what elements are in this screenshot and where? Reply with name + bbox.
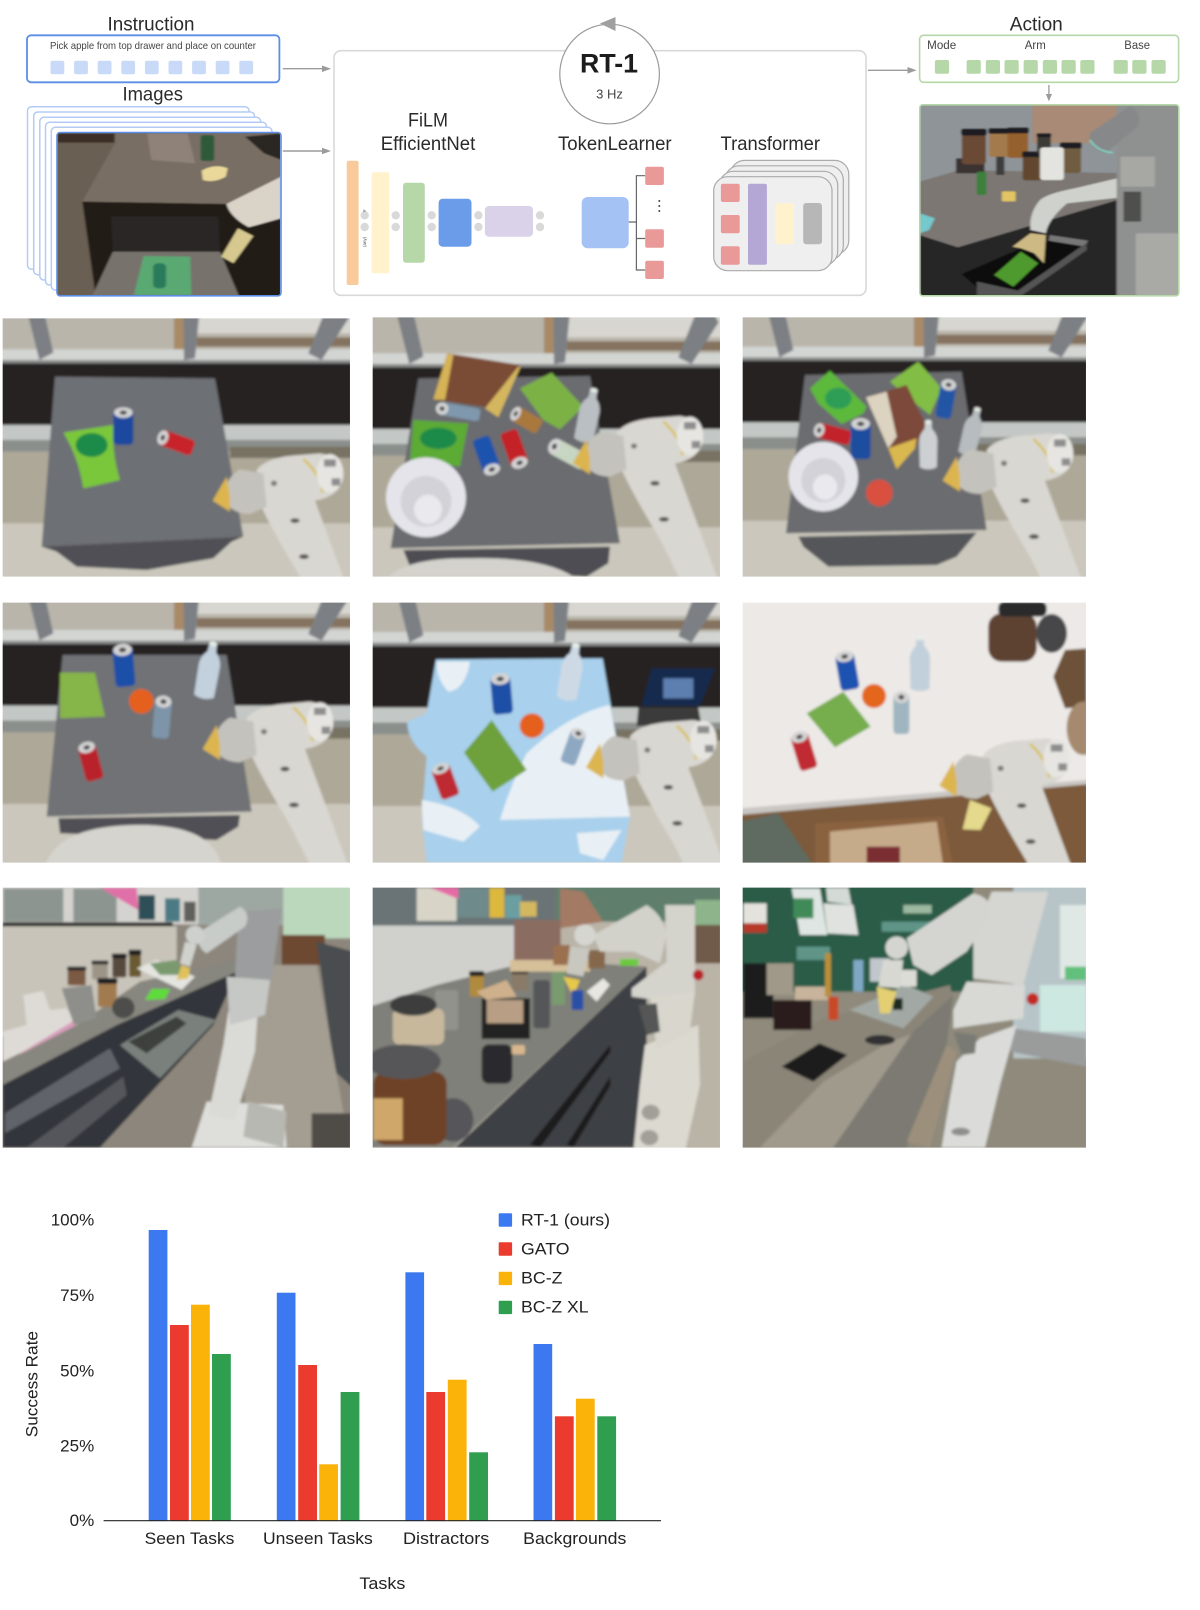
action labels: Base xyxy=(1124,40,1150,52)
tiny rotated labels: # xyxy=(362,209,367,212)
connector dots xyxy=(360,211,544,231)
table top xyxy=(42,377,243,547)
table drawers xyxy=(42,537,243,570)
heading: TokenLearner: TokenLearner xyxy=(558,133,672,155)
action labels xyxy=(927,40,1150,52)
robot base xyxy=(192,1102,287,1148)
RT-1 loop circle xyxy=(560,17,659,124)
e-stop xyxy=(693,970,704,980)
robot arm xyxy=(198,907,247,953)
heading: FiLM EfficientNet: EfficientNet xyxy=(381,133,476,155)
vents xyxy=(951,1128,970,1136)
jar at right edge xyxy=(1067,702,1100,755)
action labels: Arm xyxy=(1025,40,1046,52)
wood column xyxy=(514,920,561,963)
table top xyxy=(47,655,252,817)
vents xyxy=(642,1105,660,1120)
dong bag xyxy=(410,420,468,467)
counter top xyxy=(3,960,237,1085)
action token squares xyxy=(935,60,1166,74)
window panes xyxy=(3,888,63,922)
Pepsi can xyxy=(112,643,136,687)
arrow: images to RT-1 xyxy=(283,148,331,154)
water bottle xyxy=(573,386,604,444)
top right mural xyxy=(198,885,285,925)
robot arm xyxy=(572,414,717,576)
Pepsi can xyxy=(472,435,502,478)
mesh cup xyxy=(1036,614,1067,653)
right cabinet xyxy=(317,942,353,1088)
orange xyxy=(129,689,154,714)
wood planter xyxy=(282,935,325,965)
table drawers xyxy=(798,533,977,567)
brown chip bag xyxy=(439,352,520,408)
water bottle xyxy=(556,641,587,702)
TokenLearner block and tokens xyxy=(582,167,664,279)
posters xyxy=(138,895,155,920)
wall xyxy=(0,926,177,1036)
chip bag xyxy=(63,425,120,488)
green bag xyxy=(60,673,105,718)
legend: GATO xyxy=(521,1239,570,1258)
orange xyxy=(520,713,544,738)
y axis tick labels xyxy=(51,1211,94,1530)
y axis tick labels: 100% xyxy=(51,1211,94,1230)
photo: table with chips, Pepsi and Coke xyxy=(2,318,350,577)
bar chart: success rate by task type xyxy=(22,1211,661,1593)
Coke can xyxy=(789,729,818,772)
counter xyxy=(370,960,647,1148)
Pepsi can upright xyxy=(935,378,957,419)
Transformer stack xyxy=(714,160,849,271)
Coke can xyxy=(430,761,460,801)
white bowl xyxy=(789,442,858,511)
drawer fronts xyxy=(5,1048,120,1133)
green bag xyxy=(807,692,871,747)
water bottle xyxy=(193,640,224,701)
photo: robot at counter with open drawer xyxy=(0,885,367,1158)
sky cloth table xyxy=(407,658,630,863)
robot mid body xyxy=(953,982,1025,1028)
photo: white kitchen counter xyxy=(740,600,1107,962)
stool xyxy=(45,825,222,867)
legend: BC-Z XL xyxy=(521,1298,588,1317)
robot head xyxy=(632,905,695,1000)
cable xyxy=(865,1035,895,1045)
robot arm xyxy=(941,433,1080,576)
image frame xyxy=(57,132,281,296)
Coke can xyxy=(77,740,104,782)
photo: table with many objects and bowl xyxy=(372,317,720,577)
oat jar xyxy=(390,994,444,1045)
wooden cabinets xyxy=(740,780,1107,873)
e-stop xyxy=(1027,993,1039,1005)
y axis tick labels: 75% xyxy=(60,1286,94,1305)
stool xyxy=(388,558,573,577)
x axis title: Tasks xyxy=(359,1574,405,1593)
robot arm xyxy=(211,452,345,576)
cabinet xyxy=(833,995,953,1148)
category labels: Seen Tasks xyxy=(145,1529,234,1548)
wooden plinth xyxy=(907,1045,957,1148)
dong bag xyxy=(810,371,867,424)
ellipsis dots xyxy=(658,200,660,212)
robot waist xyxy=(650,992,695,1048)
counter edge xyxy=(740,778,1107,815)
robot arm xyxy=(939,738,1107,962)
yellow gripper finger xyxy=(963,800,992,830)
arrow: action to robot xyxy=(1046,85,1052,101)
heading: Instruction: Instruction xyxy=(108,14,194,36)
cabinet xyxy=(455,967,647,1148)
heading: FiLM EfficientNet xyxy=(381,110,476,155)
Pepsi can xyxy=(834,649,860,691)
mesh cup xyxy=(482,1044,512,1084)
silver can xyxy=(560,726,588,766)
upper wall xyxy=(0,885,203,924)
action box xyxy=(920,35,1179,82)
fridge xyxy=(1013,885,1107,1058)
robot arm xyxy=(586,720,753,943)
bottles xyxy=(919,420,937,469)
posters xyxy=(792,888,827,935)
arrow: instruction to RT-1 xyxy=(283,66,331,72)
cabinet grooves xyxy=(530,1045,611,1148)
brown bag xyxy=(886,384,926,449)
silver can xyxy=(435,401,481,422)
pink mural xyxy=(100,888,138,910)
apple xyxy=(866,480,893,506)
photo: table with bowl and apple xyxy=(742,317,1086,577)
clutter xyxy=(825,953,831,997)
FiLM EfficientNet blocks xyxy=(347,161,544,285)
almond jar xyxy=(366,1044,447,1145)
token squares xyxy=(645,167,664,279)
table base xyxy=(58,815,240,840)
y axis tick labels: 50% xyxy=(60,1361,94,1380)
heading: FiLM EfficientNet: FiLM xyxy=(408,110,448,132)
robot column xyxy=(942,1025,1017,1148)
silver can xyxy=(152,695,172,739)
robot column xyxy=(208,1002,258,1120)
metal canister xyxy=(62,985,97,1025)
category labels: Backgrounds xyxy=(523,1529,626,1548)
instruction text: Pick apple from top drawer and place on counter xyxy=(50,41,257,52)
mirror xyxy=(370,885,556,926)
bars: Distractors xyxy=(405,1272,488,1521)
bag label xyxy=(76,433,108,457)
wrist sensor xyxy=(953,1032,977,1055)
title: RT-1: RT-1 xyxy=(580,49,638,79)
category labels: Distractors xyxy=(403,1529,489,1548)
heading: Action: Action xyxy=(1010,14,1063,36)
bars: Backgrounds xyxy=(534,1344,616,1521)
robot shoulder xyxy=(973,892,1048,985)
Pepsi can xyxy=(113,407,133,445)
wall xyxy=(370,926,514,1006)
green bag xyxy=(520,373,583,429)
water bottle xyxy=(910,636,930,691)
jar xyxy=(988,602,1047,662)
tray xyxy=(137,960,195,990)
Pepsi can xyxy=(490,672,513,715)
grey cabinet door xyxy=(740,813,812,867)
Coke can xyxy=(812,422,852,446)
floor sheen xyxy=(240,965,350,1148)
photo: sky-cloth table xyxy=(370,573,753,943)
category labels xyxy=(145,1529,626,1548)
open drawer xyxy=(815,817,953,867)
sign xyxy=(743,903,767,923)
token bracket xyxy=(629,176,645,270)
juice can xyxy=(546,437,582,471)
action image frame xyxy=(920,105,1179,296)
panel: instruction tokens xyxy=(27,35,279,82)
Pepsi can xyxy=(851,418,871,459)
loop arrow head xyxy=(600,17,616,31)
shadow on counter xyxy=(433,1098,473,1142)
instruction token squares xyxy=(50,61,253,74)
legend xyxy=(499,1211,610,1317)
Coke can xyxy=(500,428,530,471)
x axis line xyxy=(104,1520,661,1522)
orange xyxy=(862,684,886,708)
green bag xyxy=(890,362,942,415)
legend: RT-1 (ours) xyxy=(521,1211,610,1230)
photo: robot at counter with jars xyxy=(366,885,737,1158)
Coke can xyxy=(155,428,196,456)
photo: robot in green tile kitchen xyxy=(740,885,1107,1158)
panel: image stack xyxy=(28,107,283,300)
wrist sensor xyxy=(638,1003,660,1035)
tiny rotated labels xyxy=(362,209,367,247)
front camera image: drawer scene xyxy=(54,130,283,300)
robot waist xyxy=(227,977,270,1025)
panel: action tokens xyxy=(920,35,1179,82)
panel: RT-1 model xyxy=(334,17,866,295)
y axis tick labels: 25% xyxy=(60,1437,94,1456)
bars: Unseen Tasks xyxy=(277,1293,359,1521)
snack can xyxy=(508,405,544,434)
counter xyxy=(743,985,953,1148)
table top xyxy=(391,376,620,548)
white bowl xyxy=(386,457,466,537)
mural xyxy=(556,885,723,922)
white counter xyxy=(740,600,1107,873)
robot head xyxy=(235,908,282,980)
table base xyxy=(403,547,610,577)
y axis title: Success Rate xyxy=(22,1331,42,1437)
action labels: Mode xyxy=(927,40,956,52)
instruction box xyxy=(27,35,279,82)
cabinet xyxy=(3,972,237,1148)
heading: Transformer: Transformer xyxy=(721,133,821,155)
stacked frames xyxy=(28,107,272,290)
heading: Images: Images xyxy=(122,84,183,106)
green bag xyxy=(145,989,170,1000)
robot arm xyxy=(593,905,667,963)
cracker xyxy=(512,1045,525,1054)
rate: 3 Hz: 3 Hz xyxy=(596,87,623,102)
green bag xyxy=(464,720,527,792)
y axis tick labels: 0% xyxy=(70,1511,94,1530)
photo: table with orange and cans xyxy=(2,602,350,863)
open drawer xyxy=(120,1010,216,1078)
cloud patches xyxy=(422,662,630,860)
black line xyxy=(3,922,173,926)
action image: robot opening drawer xyxy=(918,103,1182,300)
table top xyxy=(786,372,987,533)
green tile wall xyxy=(740,885,973,992)
arrow: RT-1 to action xyxy=(868,67,916,74)
jars xyxy=(67,967,86,985)
robot arm xyxy=(907,893,991,975)
small items xyxy=(469,971,484,997)
robot lower column xyxy=(633,1025,700,1152)
bars: Seen Tasks xyxy=(149,1230,231,1521)
legend: BC-Z xyxy=(521,1269,562,1288)
model outline xyxy=(334,51,866,295)
tiny rotated labels: (any) xyxy=(362,236,367,247)
silver can xyxy=(893,691,909,734)
robot arm xyxy=(203,702,370,925)
basket xyxy=(1053,648,1087,708)
category labels: Unseen Tasks xyxy=(263,1529,373,1548)
dark machine xyxy=(743,963,773,1018)
laptop xyxy=(637,668,715,726)
black pad xyxy=(782,1043,847,1082)
robot mat xyxy=(243,1102,287,1148)
